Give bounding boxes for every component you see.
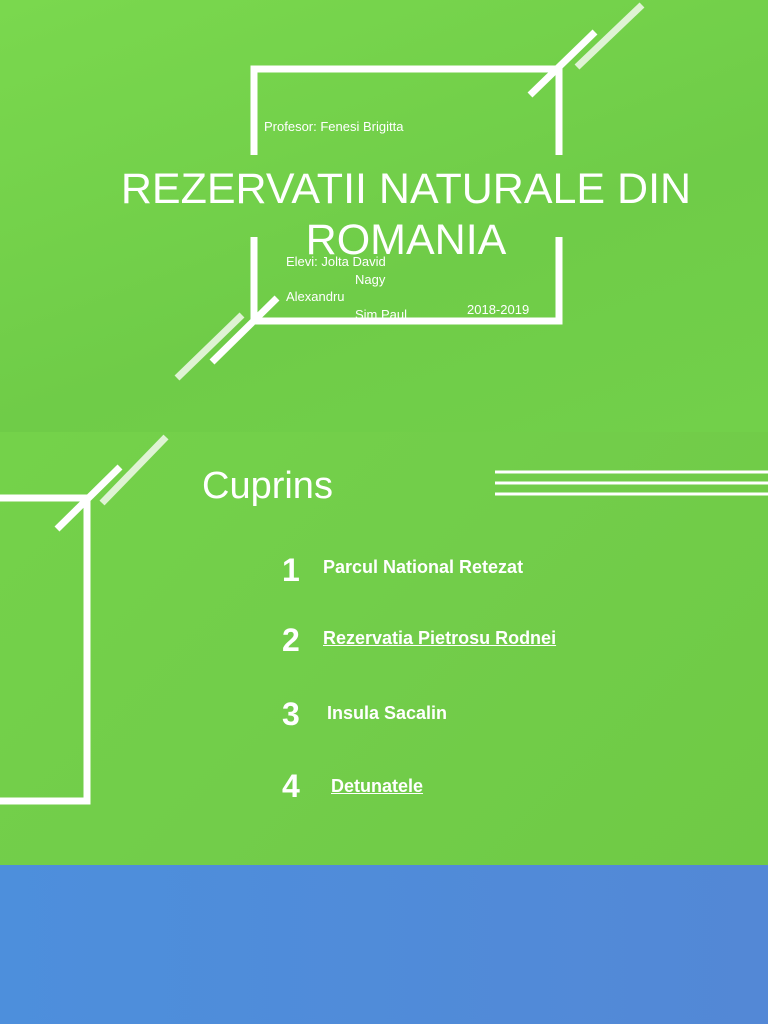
- title: REZERVATII NATURALE DIN: [121, 165, 691, 213]
- professor text: Profesor: Fenesi Brigitta: [264, 119, 403, 134]
- item 3: 3: [282, 696, 300, 732]
- list of contents: Parcul National Retezat: [323, 557, 523, 577]
- slide 2 background: [0, 432, 768, 865]
- students: Sim Paul: [355, 306, 407, 322]
- students: Nagy: [355, 272, 385, 286]
- list of contents: Insula Sacalin: [327, 703, 447, 723]
- decorative stripes: [495, 472, 768, 494]
- item 1: 1: [282, 552, 300, 588]
- list of contents: Detunatele: [331, 776, 423, 796]
- frame: title: [177, 5, 642, 378]
- students: Alexandru: [286, 289, 345, 304]
- list of contents: Rezervatia Pietrosu Rodnei: [323, 628, 556, 648]
- heading: Cuprins: Cuprins: [202, 465, 333, 507]
- list of contents: [282, 552, 556, 804]
- item 2: 2: [282, 622, 300, 658]
- title: ROMANIA: [306, 216, 506, 264]
- year: 2018-2019: [467, 302, 529, 317]
- students: Elevi: Jolta David: [286, 254, 386, 269]
- blue slide background: [0, 865, 768, 1024]
- title: [121, 165, 691, 264]
- frame: contents: [0, 437, 166, 801]
- slide 1 background: [0, 0, 768, 432]
- item 4: 4: [282, 768, 300, 804]
- students: [286, 254, 407, 322]
